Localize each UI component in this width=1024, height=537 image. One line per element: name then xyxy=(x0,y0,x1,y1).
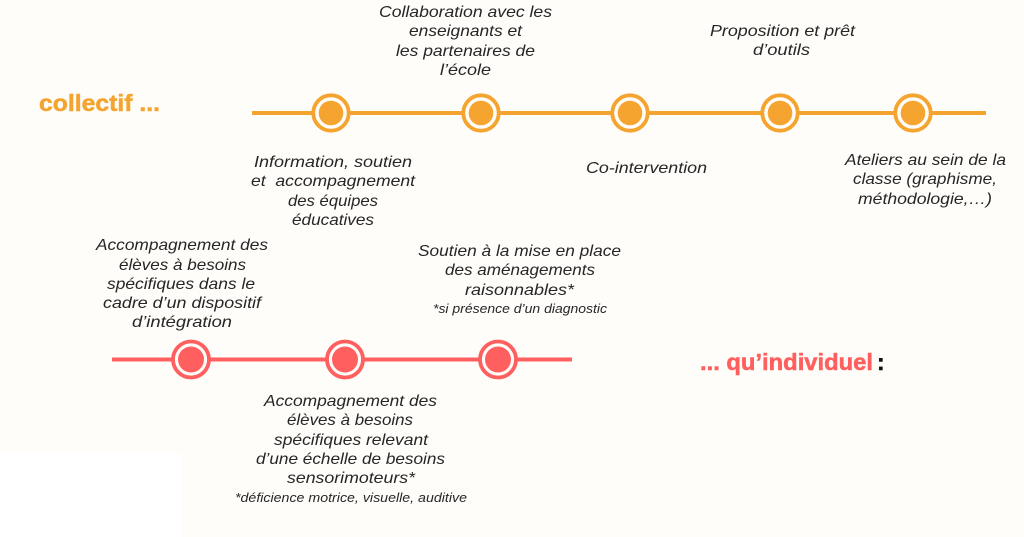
text: ateliers: classe (graphisme, xyxy=(853,171,997,188)
text: aménagements raisonnables xyxy=(418,243,621,316)
orange node 4 xyxy=(762,95,798,131)
red node 3 xyxy=(480,342,516,378)
heading: qu'individuel: ... qu’individuel xyxy=(700,349,873,375)
text: information: éducatives xyxy=(292,212,374,229)
orange node 5 xyxy=(895,95,931,131)
text: collaboration: l’école xyxy=(440,62,491,79)
text: ateliers: méthodologie,…) xyxy=(858,191,992,208)
text: information: et accompagnement xyxy=(251,173,416,190)
text: information: des équipes xyxy=(288,193,378,210)
text: dispositif d'intégration: spécifiques dans le xyxy=(107,276,255,293)
text: co-intervention: Co-intervention xyxy=(586,160,707,177)
text: collaboration xyxy=(379,4,552,79)
heading: collectif: collectif ... xyxy=(39,90,160,116)
red node 1 xyxy=(173,342,209,378)
text: aménagements raisonnables: raisonnables* xyxy=(465,282,575,299)
text: besoins sensorimoteurs xyxy=(235,393,467,505)
text: ateliers: Ateliers au sein de la xyxy=(844,152,1006,169)
text: besoins sensorimoteurs: spécifiques relevant xyxy=(274,432,429,449)
text: besoins sensorimoteurs: d’une échelle de besoins xyxy=(256,451,445,468)
heading: qu'individuel: : xyxy=(877,349,885,375)
text: besoins sensorimoteurs: *déficience motrice, visuelle, auditive xyxy=(235,491,467,505)
text: dispositif d'intégration: Accompagnement des xyxy=(95,237,268,254)
text: dispositif d'intégration: cadre d’un dispositif xyxy=(103,295,263,312)
text: besoins sensorimoteurs: élèves à besoins xyxy=(287,412,413,429)
red node 2 xyxy=(327,342,363,378)
text: proposition: Proposition et prêt xyxy=(710,23,856,40)
text: aménagements raisonnables: Soutien à la mise en place xyxy=(418,243,621,260)
text: ateliers xyxy=(844,152,1006,208)
text: proposition: d’outils xyxy=(753,42,810,59)
orange timeline xyxy=(252,95,986,131)
text: information: Information, soutien xyxy=(254,154,412,171)
text: collaboration: Collaboration avec les xyxy=(379,4,552,21)
orange node 2 xyxy=(463,95,499,131)
text: information xyxy=(251,154,416,229)
text: proposition xyxy=(710,23,856,59)
text: dispositif d'intégration xyxy=(95,237,268,331)
orange node 1 xyxy=(313,95,349,131)
text: aménagements raisonnables: des aménagements xyxy=(445,262,595,279)
text: besoins sensorimoteurs: sensorimoteurs* xyxy=(287,470,416,487)
text: dispositif d'intégration: d’intégration xyxy=(132,314,232,331)
text: besoins sensorimoteurs: Accompagnement des xyxy=(263,393,437,410)
text: dispositif d'intégration: élèves à besoins xyxy=(119,257,246,274)
orange node 3 xyxy=(612,95,648,131)
text: collaboration: les partenaires de xyxy=(396,43,535,60)
text: collaboration: enseignants et xyxy=(409,23,523,40)
text: aménagements raisonnables: *si présence d’un diagnostic xyxy=(433,302,608,316)
red timeline xyxy=(112,342,572,378)
